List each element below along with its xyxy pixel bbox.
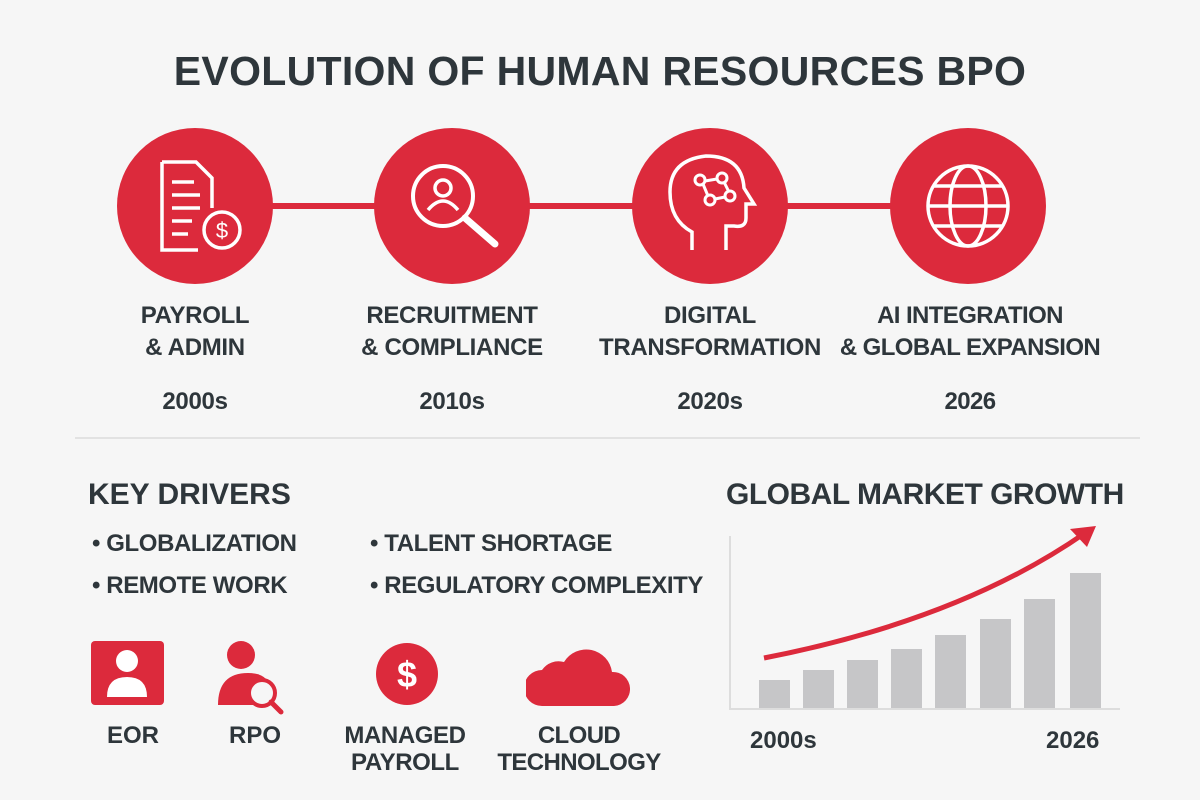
stage 2: RECRUITMENT (366, 302, 538, 329)
Cloud technology: CLOUD (538, 722, 620, 749)
growth arrow (764, 526, 1096, 658)
RPO: RPO (229, 722, 281, 749)
stage labels (141, 302, 1100, 415)
icon: digital brain head (632, 128, 788, 284)
stage 3: TRANSFORMATION (599, 334, 821, 361)
stage 4: 2026 (944, 388, 996, 415)
timeline (117, 128, 1046, 284)
key drivers heading: KEY DRIVERS (88, 478, 291, 511)
service icons (91, 641, 661, 776)
Managed payroll: PAYROLL (351, 749, 459, 776)
stage 1: PAYROLL (141, 302, 249, 329)
stage 1 (141, 302, 249, 415)
RPO (218, 641, 284, 749)
icon: globe (890, 128, 1046, 284)
title: EVOLUTION OF HUMAN RESOURCES BPO (174, 48, 1026, 94)
drivers list (92, 530, 703, 599)
market growth heading: GLOBAL MARKET GROWTH (726, 478, 1124, 511)
icon: recruitment magnifier (374, 128, 530, 284)
timeline connector (195, 203, 968, 209)
Cloud technology (497, 650, 661, 776)
stage 2: 2010s (419, 388, 485, 415)
drivers list: • GLOBALIZATION (92, 530, 297, 557)
stage 2: & COMPLIANCE (361, 334, 543, 361)
EOR (91, 641, 164, 749)
stage 3 (599, 302, 821, 415)
drivers list: • REGULATORY COMPLEXITY (370, 572, 703, 599)
bar chart: 2026 (1046, 727, 1099, 754)
stage 2 (361, 302, 543, 415)
stage 1: & ADMIN (145, 334, 245, 361)
Managed payroll: $ (397, 654, 417, 695)
icon: payroll document: $ (216, 218, 228, 243)
icon: payroll document (117, 128, 273, 284)
EOR: EOR (107, 722, 159, 749)
Managed payroll: MANAGED (344, 722, 466, 749)
stage 3: DIGITAL (664, 302, 756, 329)
stage 3: 2020s (677, 388, 743, 415)
stage 4: AI INTEGRATION (877, 302, 1063, 329)
bar chart: 2000s (750, 727, 817, 754)
stage 1: 2000s (162, 388, 228, 415)
stage 4 (840, 302, 1100, 415)
Cloud technology: TECHNOLOGY (497, 749, 661, 776)
Managed payroll (344, 643, 466, 776)
drivers list: • TALENT SHORTAGE (370, 530, 612, 557)
stage 4: & GLOBAL EXPANSION (840, 334, 1100, 361)
drivers list: • REMOTE WORK (92, 572, 287, 599)
